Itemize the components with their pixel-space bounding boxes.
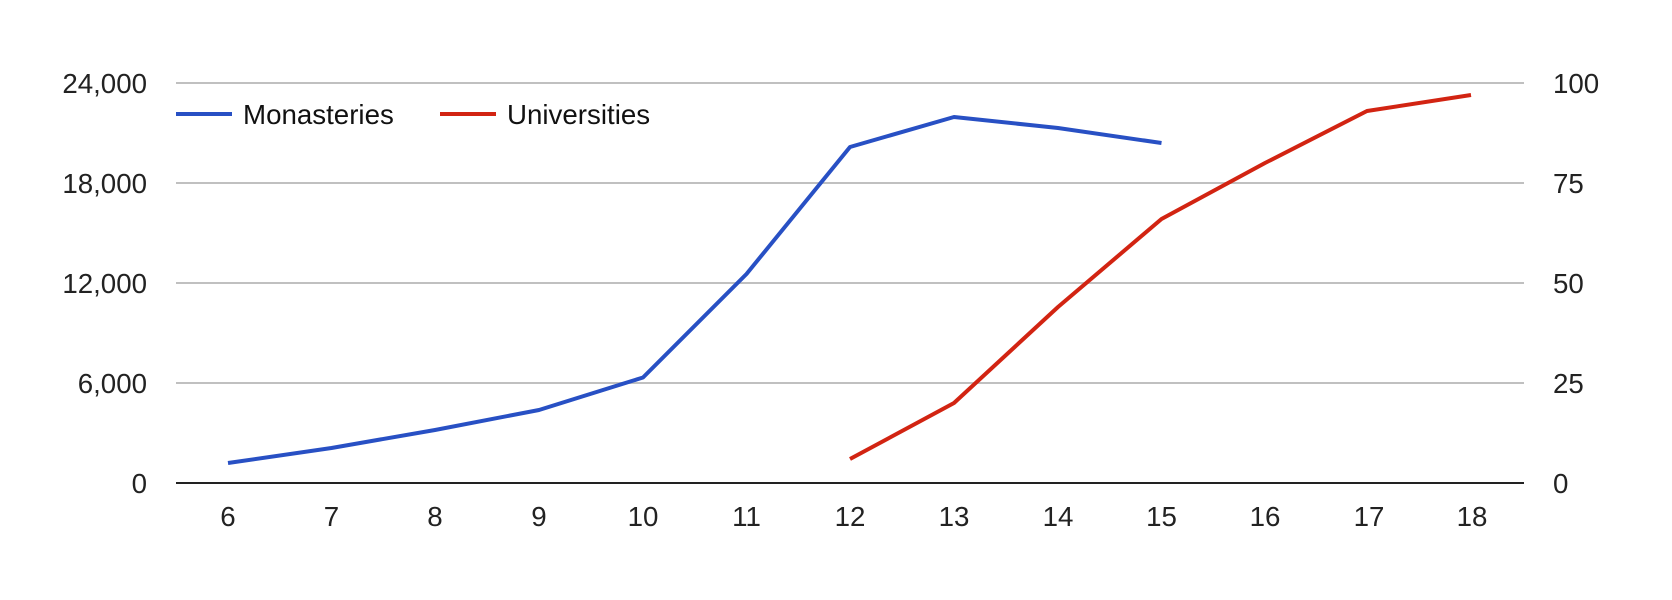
left y axis labels: 6,000: [78, 368, 147, 399]
left y axis labels: 18,000: [62, 168, 147, 199]
x axis labels: centuries: 8: [427, 501, 443, 532]
left y axis labels: 0: [132, 468, 147, 499]
x axis labels: centuries: 9: [531, 501, 547, 532]
left y axis labels: [62, 68, 147, 499]
legend: [176, 99, 650, 130]
x axis labels: centuries: 16: [1250, 501, 1280, 532]
x axis labels: centuries: 10: [628, 501, 658, 532]
right y axis labels: 100: [1553, 68, 1599, 99]
legend: monasteries: [176, 99, 394, 130]
line: universities: [850, 95, 1471, 459]
legend: monasteries: Monasteries: [243, 99, 394, 130]
right y axis labels: 0: [1553, 468, 1568, 499]
x axis labels: centuries: [220, 501, 1487, 532]
right y axis labels: [1553, 68, 1599, 499]
x axis labels: centuries: 6: [220, 501, 236, 532]
x axis labels: centuries: 12: [835, 501, 865, 532]
right y axis labels: 50: [1553, 268, 1584, 299]
right y axis labels: 25: [1553, 368, 1584, 399]
legend: universities: [440, 99, 650, 130]
x axis labels: centuries: 18: [1457, 501, 1487, 532]
x axis baseline: [176, 482, 1524, 484]
line: monasteries: [228, 117, 1162, 463]
left y axis labels: 12,000: [62, 268, 147, 299]
x axis labels: centuries: 15: [1146, 501, 1177, 532]
right y axis labels: 75: [1553, 168, 1584, 199]
left y axis labels: 24,000: [62, 68, 147, 99]
x axis labels: centuries: 11: [732, 501, 761, 532]
x axis labels: centuries: 17: [1354, 501, 1384, 532]
x axis labels: centuries: 13: [939, 501, 969, 532]
x axis labels: centuries: 7: [324, 501, 339, 532]
x axis labels: centuries: 14: [1043, 501, 1073, 532]
legend: universities: Universities: [507, 99, 650, 130]
